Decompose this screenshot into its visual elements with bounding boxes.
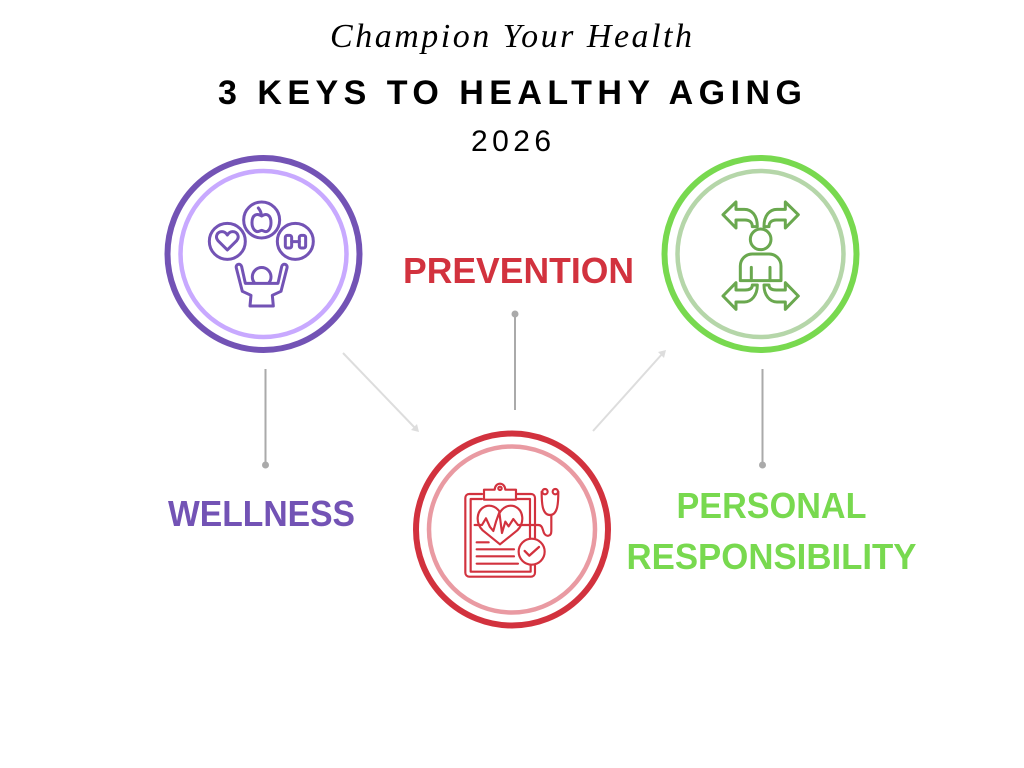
panel: personal responsibility circle: [664, 158, 856, 350]
connector: wellness label: [262, 369, 269, 468]
connector: prevention label: [512, 310, 518, 410]
icon: juggling health symbols: [209, 202, 313, 306]
panel: wellness circle: [168, 158, 360, 350]
subheading: year: 2026: [471, 125, 551, 158]
panel: prevention circle: [416, 434, 608, 626]
label: wellness: WELLNESS: [168, 493, 355, 534]
connector: personal responsibility label: [759, 369, 766, 468]
heading: 3 keys to healthy aging: 3 KEYS TO HEALTHY AGING: [218, 74, 802, 112]
label: personal responsibility: RESPONSIBILITY: [626, 536, 916, 577]
label: prevention: PREVENTION: [403, 250, 634, 291]
arrow: wellness to prevention: [343, 353, 419, 432]
label: personal responsibility: PERSONAL: [676, 485, 866, 526]
icon: clipboard with heart and stethoscope: [465, 484, 558, 577]
icon: person with four arrows: [723, 202, 798, 309]
label: personal responsibility: [626, 485, 916, 577]
arrow: prevention to personal responsibility: [593, 350, 666, 431]
title: Champion Your Health: Champion Your Health: [330, 18, 692, 55]
